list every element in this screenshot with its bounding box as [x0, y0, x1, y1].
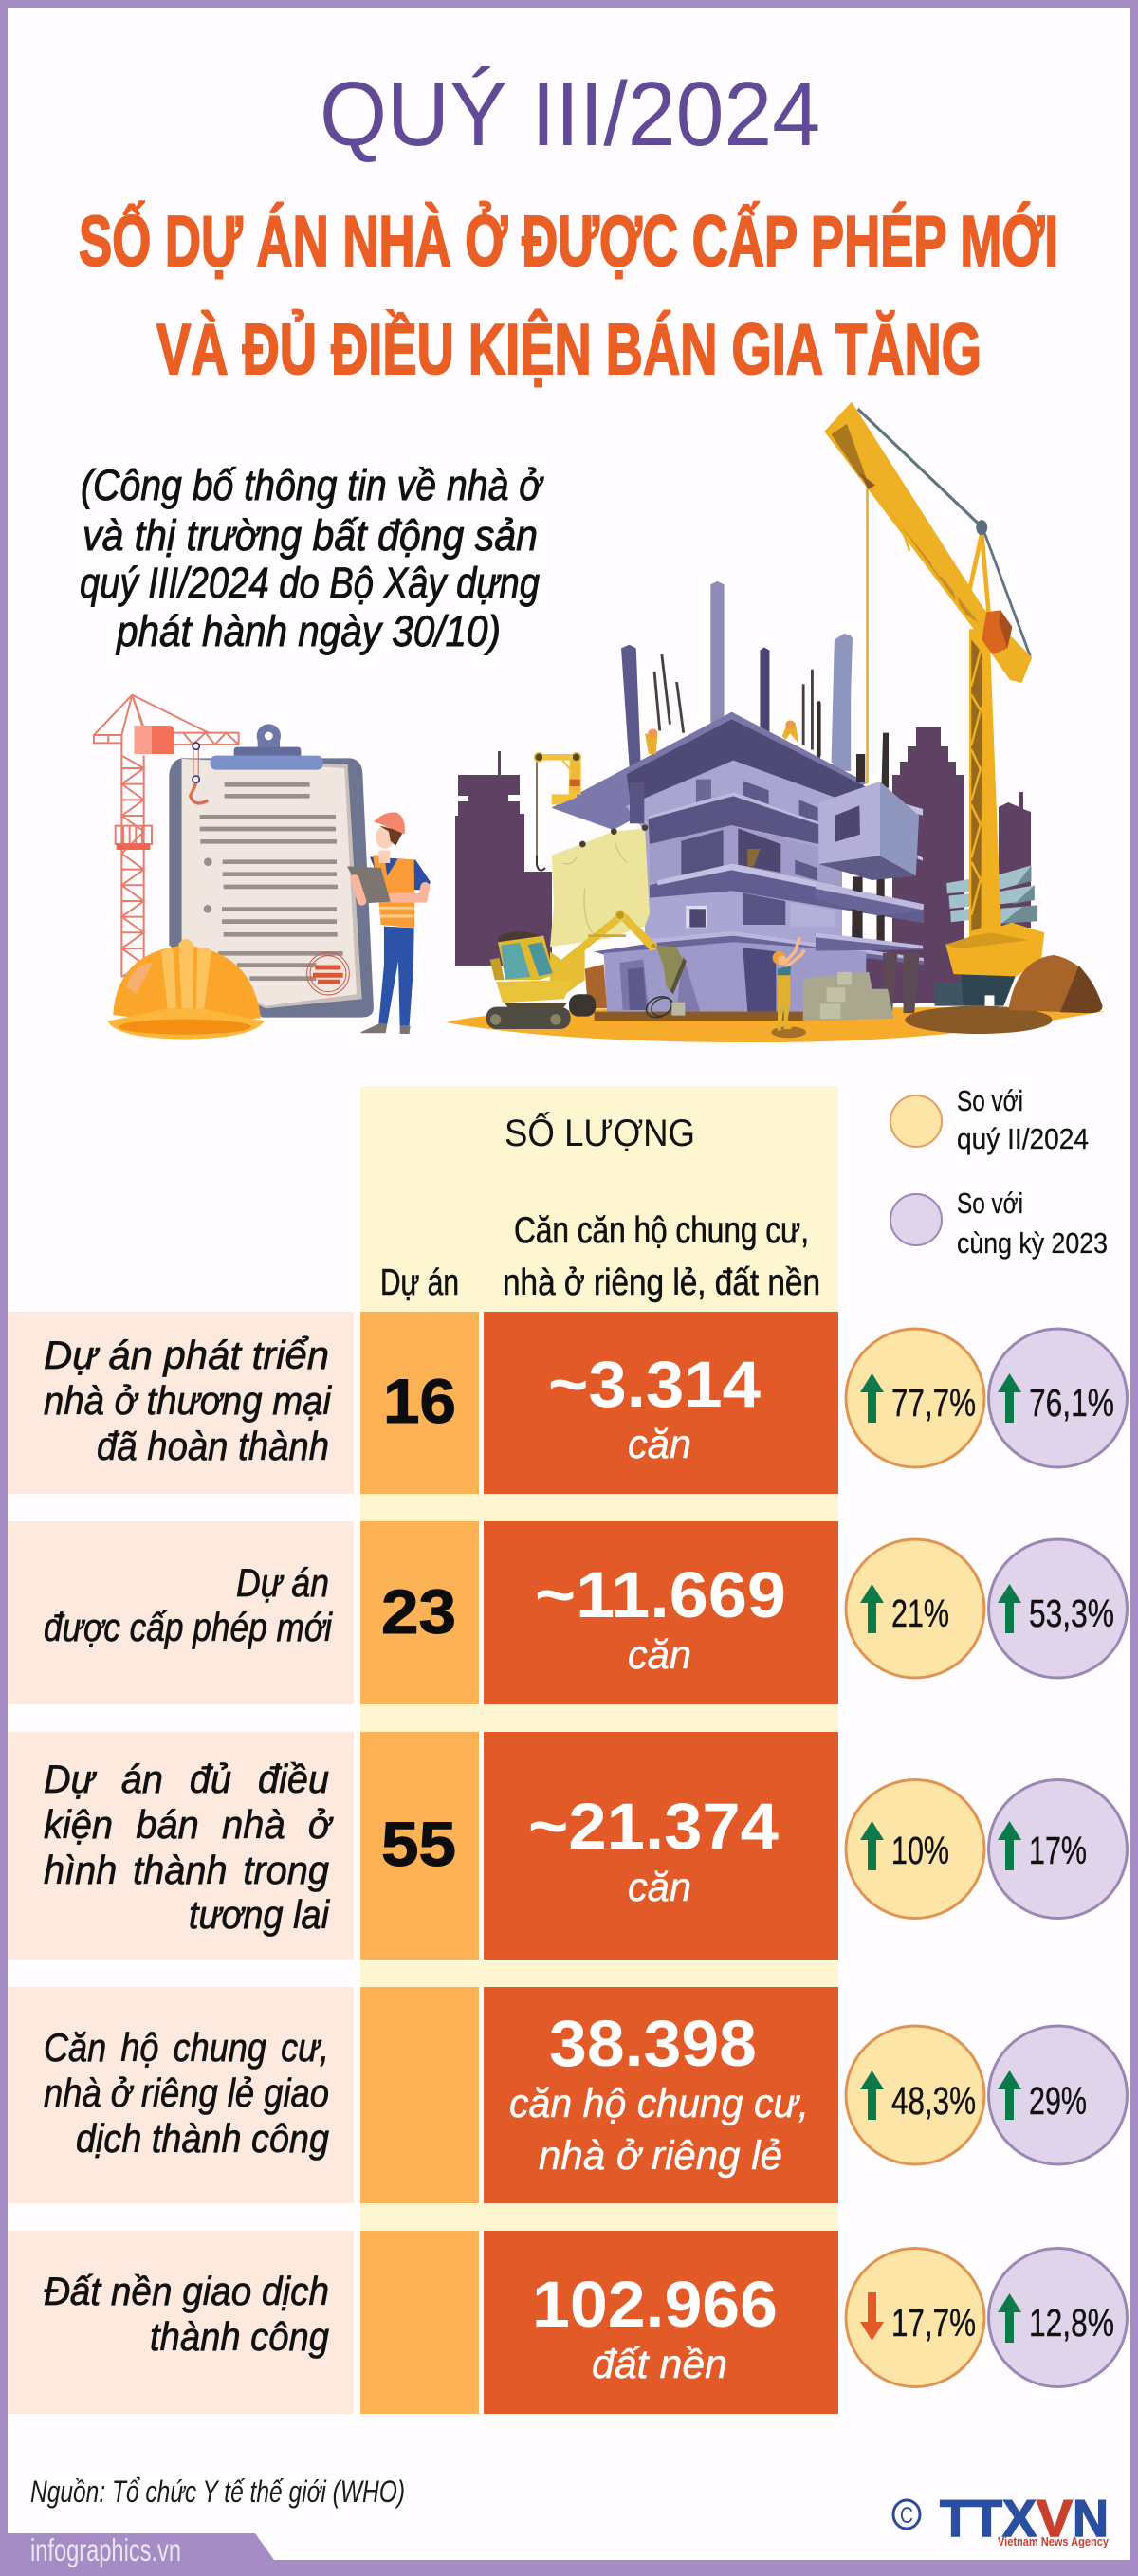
floor 3 wall [650, 825, 842, 904]
row 4 unit count: nhà ở riêng lẻ [539, 2133, 782, 2179]
illustration: clipboard scene [94, 695, 431, 1040]
wordmark: V [1037, 2489, 1073, 2548]
row 2 label [44, 1560, 333, 1649]
row 2 label: được cấp phép mới [44, 1605, 333, 1649]
upper wall [626, 761, 842, 999]
row 4 [8, 1987, 1127, 2203]
agency name: Vietnam News Agency [998, 2534, 1110, 2548]
row 5 unit count [532, 2268, 778, 2387]
illustration: rooftop columns and rods [621, 581, 851, 771]
legend: same period last year: cùng kỳ 2023 [957, 1226, 1108, 1260]
copyright mark [893, 2500, 920, 2529]
row 3 change vs previous quarter: 10% [891, 1829, 949, 1872]
floor slab 3 [650, 865, 924, 923]
crane jib [824, 402, 1032, 683]
row 1 unit count [548, 1348, 761, 1467]
wordmark: TTX [940, 2489, 1037, 2548]
legend: previous quarter: quý II/2024 [957, 1122, 1089, 1155]
row 1 change vs previous quarter [846, 1329, 984, 1467]
table header: nhà ở riêng lẻ, đất nền [503, 1262, 820, 1303]
row 1 change vs last year: 76,1% [1029, 1381, 1114, 1425]
rooftop workers [645, 720, 798, 754]
intro text: quý III/2024 do Bộ Xây dựng [80, 559, 540, 607]
row 3 change vs last year [988, 1779, 1127, 1918]
row 3 label: hình thành trong [44, 1848, 329, 1892]
legend: previous quarter: So với [957, 1084, 1023, 1117]
small red crane [94, 695, 239, 977]
table header: SỐ LƯỢNG [505, 1111, 695, 1154]
TTXVN logo [893, 2489, 1110, 2548]
wordmark: N [1073, 2489, 1109, 2548]
row 5 [8, 2231, 1127, 2414]
ground floor [604, 942, 866, 1012]
row 4 label: dịch thành công [76, 2116, 329, 2161]
row 3 label: Dự án đủ điều [44, 1757, 329, 1801]
row 1 unit count: căn [628, 1422, 691, 1467]
row 2 change vs last year [988, 1539, 1127, 1678]
row 3 label: kiện bán nhà ở [44, 1802, 334, 1847]
row 4 unit count: 38.398 [549, 2007, 757, 2080]
row 1 label: nhà ở thương mại [44, 1378, 333, 1423]
soil mound [1008, 955, 1102, 1013]
clipboard clip [211, 724, 323, 770]
counterweight [982, 610, 1012, 654]
row 2 unit count: ~11.669 [535, 1558, 786, 1631]
wordmark [940, 2489, 1109, 2548]
row 2 project count: 23 [381, 1576, 456, 1647]
source note: Nguồn: Tổ chức Y tế thế giới (WHO) [30, 2475, 405, 2509]
row 2 change vs previous quarter: 21% [891, 1592, 949, 1635]
row 4 unit count: căn hộ chung cư, [509, 2081, 809, 2126]
row 5 label [44, 2269, 329, 2359]
row 1 change vs previous quarter: 77,7% [891, 1381, 976, 1425]
subtitle [79, 201, 1058, 389]
clipboard paper [182, 759, 362, 1008]
illustration: tower crane [803, 402, 1102, 1034]
row 1 label: đã hoàn thành [97, 1424, 329, 1468]
row 3 unit count: căn [628, 1865, 691, 1910]
legend: same period last year: So với [957, 1187, 1023, 1220]
copyright mark: C [900, 2503, 913, 2529]
worker with clipboard [347, 812, 431, 1034]
row 1 label: Dự án phát triển [44, 1333, 329, 1377]
row 4 label: Căn hộ chung cư, [44, 2025, 329, 2070]
row 4 label [44, 2025, 329, 2161]
row 3 unit count [528, 1790, 779, 1910]
mound behind excavator [585, 965, 607, 1008]
table column backgrounds [360, 1086, 838, 2231]
row 4 unit count [509, 2007, 809, 2179]
legend [890, 1084, 1108, 1260]
row 4 label: nhà ở riêng lẻ giao [44, 2070, 329, 2115]
row 2 [8, 1521, 1127, 1704]
ground worker [771, 937, 806, 1038]
hanging concrete block [818, 782, 923, 880]
hanging cloth [550, 824, 650, 947]
table header [380, 1111, 820, 1303]
rear column and rods [832, 634, 853, 766]
roof slab [552, 712, 867, 830]
stamp [307, 952, 349, 995]
ground shadow [905, 1006, 1053, 1034]
row 1 project count: 16 [383, 1366, 456, 1436]
table header: Dự án [380, 1262, 459, 1303]
row 3 unit count: ~21.374 [528, 1790, 779, 1863]
row 3 label: tương lai [189, 1892, 330, 1937]
clipboard board [169, 758, 374, 1018]
title: QUÝ III/2024 [320, 64, 820, 165]
row 4 change vs last year [988, 2026, 1127, 2164]
row 4 change vs previous quarter [846, 2026, 984, 2164]
excavator [486, 911, 687, 1029]
legend: previous quarter [890, 1084, 1089, 1155]
row 5 change vs previous quarter [846, 2248, 984, 2386]
intro text: (Công bố thông tin về nhà ở [81, 461, 544, 509]
row 3 project count: 55 [381, 1809, 456, 1879]
crane struts [970, 534, 988, 612]
floor slab 4 [595, 931, 924, 965]
row 5 unit count: đất nền [592, 2342, 727, 2387]
hard hat [107, 939, 265, 1040]
document lines [200, 784, 343, 979]
crane cabin [135, 726, 174, 754]
row 3 label [44, 1757, 334, 1937]
intro text: và thị trường bất động sản [83, 511, 538, 560]
row 1 unit count: ~3.314 [548, 1348, 761, 1421]
row 5 label: Đất nền giao dịch [44, 2269, 329, 2313]
row 5 change vs previous quarter: 17,7% [891, 2301, 976, 2345]
crane rope [864, 486, 872, 783]
floor 4 wall [648, 892, 842, 936]
row 3 change vs last year: 17% [1029, 1829, 1087, 1872]
row 2 change vs previous quarter [846, 1539, 984, 1678]
row 5 change vs last year: 12,8% [1029, 2301, 1114, 2345]
crane base [935, 923, 1044, 1006]
row 5 label: thành công [150, 2314, 329, 2359]
row 3 change vs previous quarter [846, 1779, 984, 1918]
row 5 change vs last year [988, 2248, 1127, 2386]
row 4 change vs previous quarter: 48,3% [891, 2079, 976, 2123]
row 2 label: Dự án [236, 1560, 329, 1605]
stone pile [803, 972, 894, 1021]
row 1 [8, 1312, 1127, 1494]
table header: Căn căn hộ chung cư, [514, 1210, 809, 1251]
illustration: building [486, 712, 924, 1038]
ground [446, 1007, 1105, 1042]
row 2 unit count: căn [628, 1632, 691, 1678]
crane mast [969, 629, 1001, 938]
slab ends [816, 883, 923, 916]
row 5 unit count: 102.966 [532, 2268, 778, 2341]
legend: same period last year [890, 1187, 1108, 1260]
row 3 [8, 1732, 1127, 1960]
crane hook [191, 743, 208, 803]
crane ties [858, 409, 1030, 656]
row 2 unit count [535, 1558, 786, 1678]
intro text: phát hành ngày 30/10) [115, 607, 501, 655]
row 4 change vs last year: 29% [1029, 2079, 1087, 2123]
floor slab 2 [648, 792, 818, 844]
dark columns [852, 876, 885, 948]
row 1 change vs last year [988, 1329, 1127, 1467]
intro text [80, 461, 544, 655]
footer tab: infographics.vn [30, 2532, 181, 2567]
small yellow crane [535, 753, 580, 871]
row 1 label [44, 1333, 333, 1468]
illustration: background skyline [455, 727, 1031, 1003]
row 2 change vs last year: 53,3% [1029, 1592, 1114, 1635]
glass panels [946, 865, 1037, 924]
